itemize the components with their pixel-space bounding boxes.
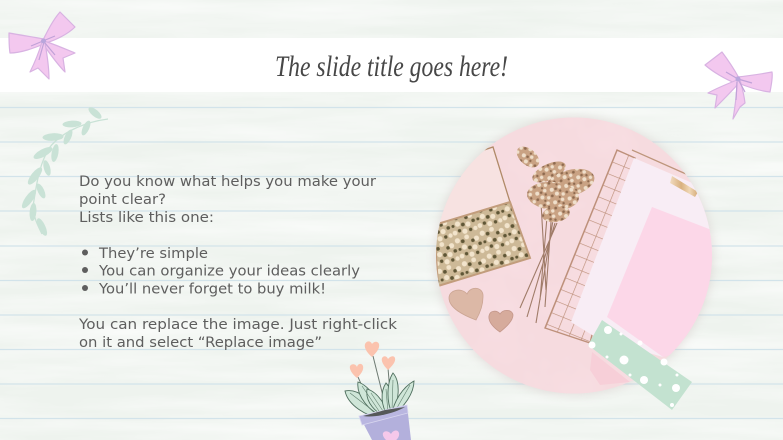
flower stems: [358, 356, 390, 400]
leaves: [345, 373, 414, 418]
lower pink corner: [590, 352, 630, 385]
white note paper: [571, 158, 720, 357]
body text: on it and select “Replace image”: [79, 335, 322, 351]
icon: leaf branch: [20, 105, 108, 237]
dried flowers: [516, 146, 594, 222]
pot: [360, 405, 411, 440]
gold frame with dried flowers: [434, 202, 530, 286]
pot heart: [383, 430, 399, 440]
washi tape: [588, 320, 692, 410]
body text: point clear?: [79, 192, 166, 208]
bullet list: You’ll never forget to buy milk!: [98, 282, 326, 298]
body text: Lists like this one:: [79, 210, 214, 226]
body text: [78, 174, 398, 351]
dried flower stems: [520, 208, 558, 324]
body text: Do you know what helps you make your: [79, 174, 376, 190]
pale card behind frame: [460, 176, 461, 177]
icon: potted plant: [345, 341, 414, 440]
bullet list: They’re simple: [98, 246, 208, 262]
bullet list: [82, 246, 360, 298]
circular photo: flat lay: [436, 118, 712, 394]
circular photo shadow: [435, 117, 713, 395]
bullet list: You can organize your ideas clearly: [98, 264, 360, 280]
icon: bow top right: [705, 52, 772, 119]
pink note: [607, 207, 722, 357]
title: The slide title goes here!: [275, 50, 508, 83]
frame wire: [484, 147, 510, 202]
body text: You can replace the image. Just right-click: [78, 317, 398, 333]
wooden hearts: [449, 288, 513, 332]
gold wire grid: [545, 150, 635, 343]
icon: bow top left: [9, 12, 75, 79]
title banner: [0, 38, 783, 92]
heart flowers: [350, 341, 395, 378]
gold clip: [670, 176, 698, 197]
ruled notebook lines: [0, 108, 783, 418]
